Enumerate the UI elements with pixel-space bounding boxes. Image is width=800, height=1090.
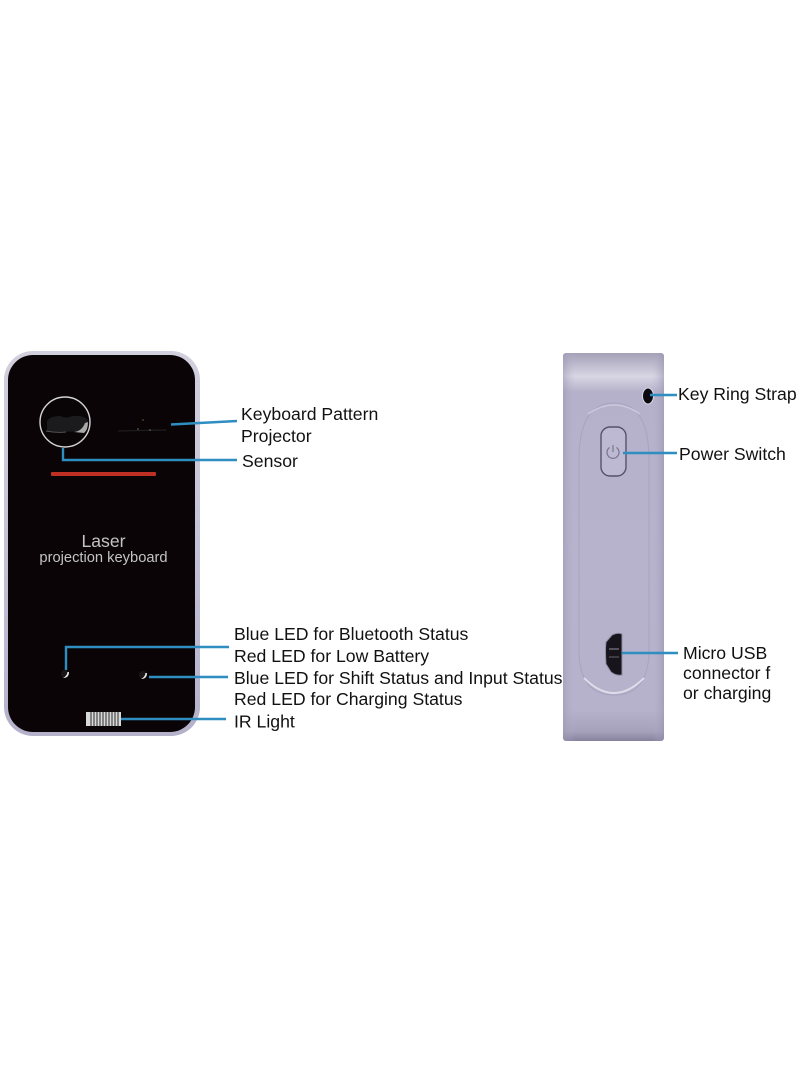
side edge shading — [563, 353, 664, 741]
line: power switch — [623, 452, 677, 454]
callout leader lines — [63, 395, 678, 719]
front view of laser keyboard — [4, 351, 200, 736]
recessed panel outline — [579, 403, 649, 695]
product name: projection keyboard — [39, 550, 168, 566]
micro USB port — [606, 633, 622, 675]
label: Bluetooth LED: Blue LED for Bluetooth Status — [234, 624, 469, 644]
product name: Laser — [81, 531, 126, 551]
red laser bar — [51, 472, 156, 476]
side view of laser keyboard — [563, 353, 664, 741]
keyboard pattern projector window — [118, 419, 166, 431]
product name — [39, 531, 168, 566]
label: power switch: Power Switch — [679, 444, 786, 464]
LED left — [61, 670, 69, 678]
device black face — [8, 355, 195, 732]
side body — [563, 353, 664, 741]
label: shift and input LED: Blue LED for Shift Status and Input Status — [234, 668, 563, 688]
label: micro USB connector: Micro USB — [683, 643, 767, 663]
line: Bluetooth LED — [66, 647, 229, 670]
sensor ring — [40, 397, 90, 447]
line: key ring strap — [650, 394, 677, 396]
label: charging LED: Red LED for Charging Status — [234, 689, 463, 709]
label: low battery LED: Red LED for Low Battery — [234, 646, 429, 666]
label: IR light: IR Light — [234, 712, 295, 732]
line: keyboard pattern projector — [171, 421, 237, 424]
IR light — [86, 712, 121, 726]
label: keyboard pattern projector: Keyboard Pattern — [241, 404, 378, 424]
key ring hole — [642, 388, 654, 404]
label: micro USB connector: or charging — [683, 683, 771, 703]
label: sensor: Sensor — [242, 451, 298, 471]
line: sensor — [63, 448, 237, 460]
LED right — [139, 671, 147, 679]
power switch button — [601, 427, 626, 476]
line: IR light — [121, 718, 226, 720]
label: keyboard pattern projector: Projector — [241, 426, 312, 446]
device body frame — [4, 351, 200, 736]
label: micro USB connector: connector f — [683, 663, 770, 683]
label: key ring strap: Key Ring Strap — [678, 384, 797, 404]
line: shift LED — [149, 676, 228, 678]
line: micro USB — [622, 652, 678, 654]
